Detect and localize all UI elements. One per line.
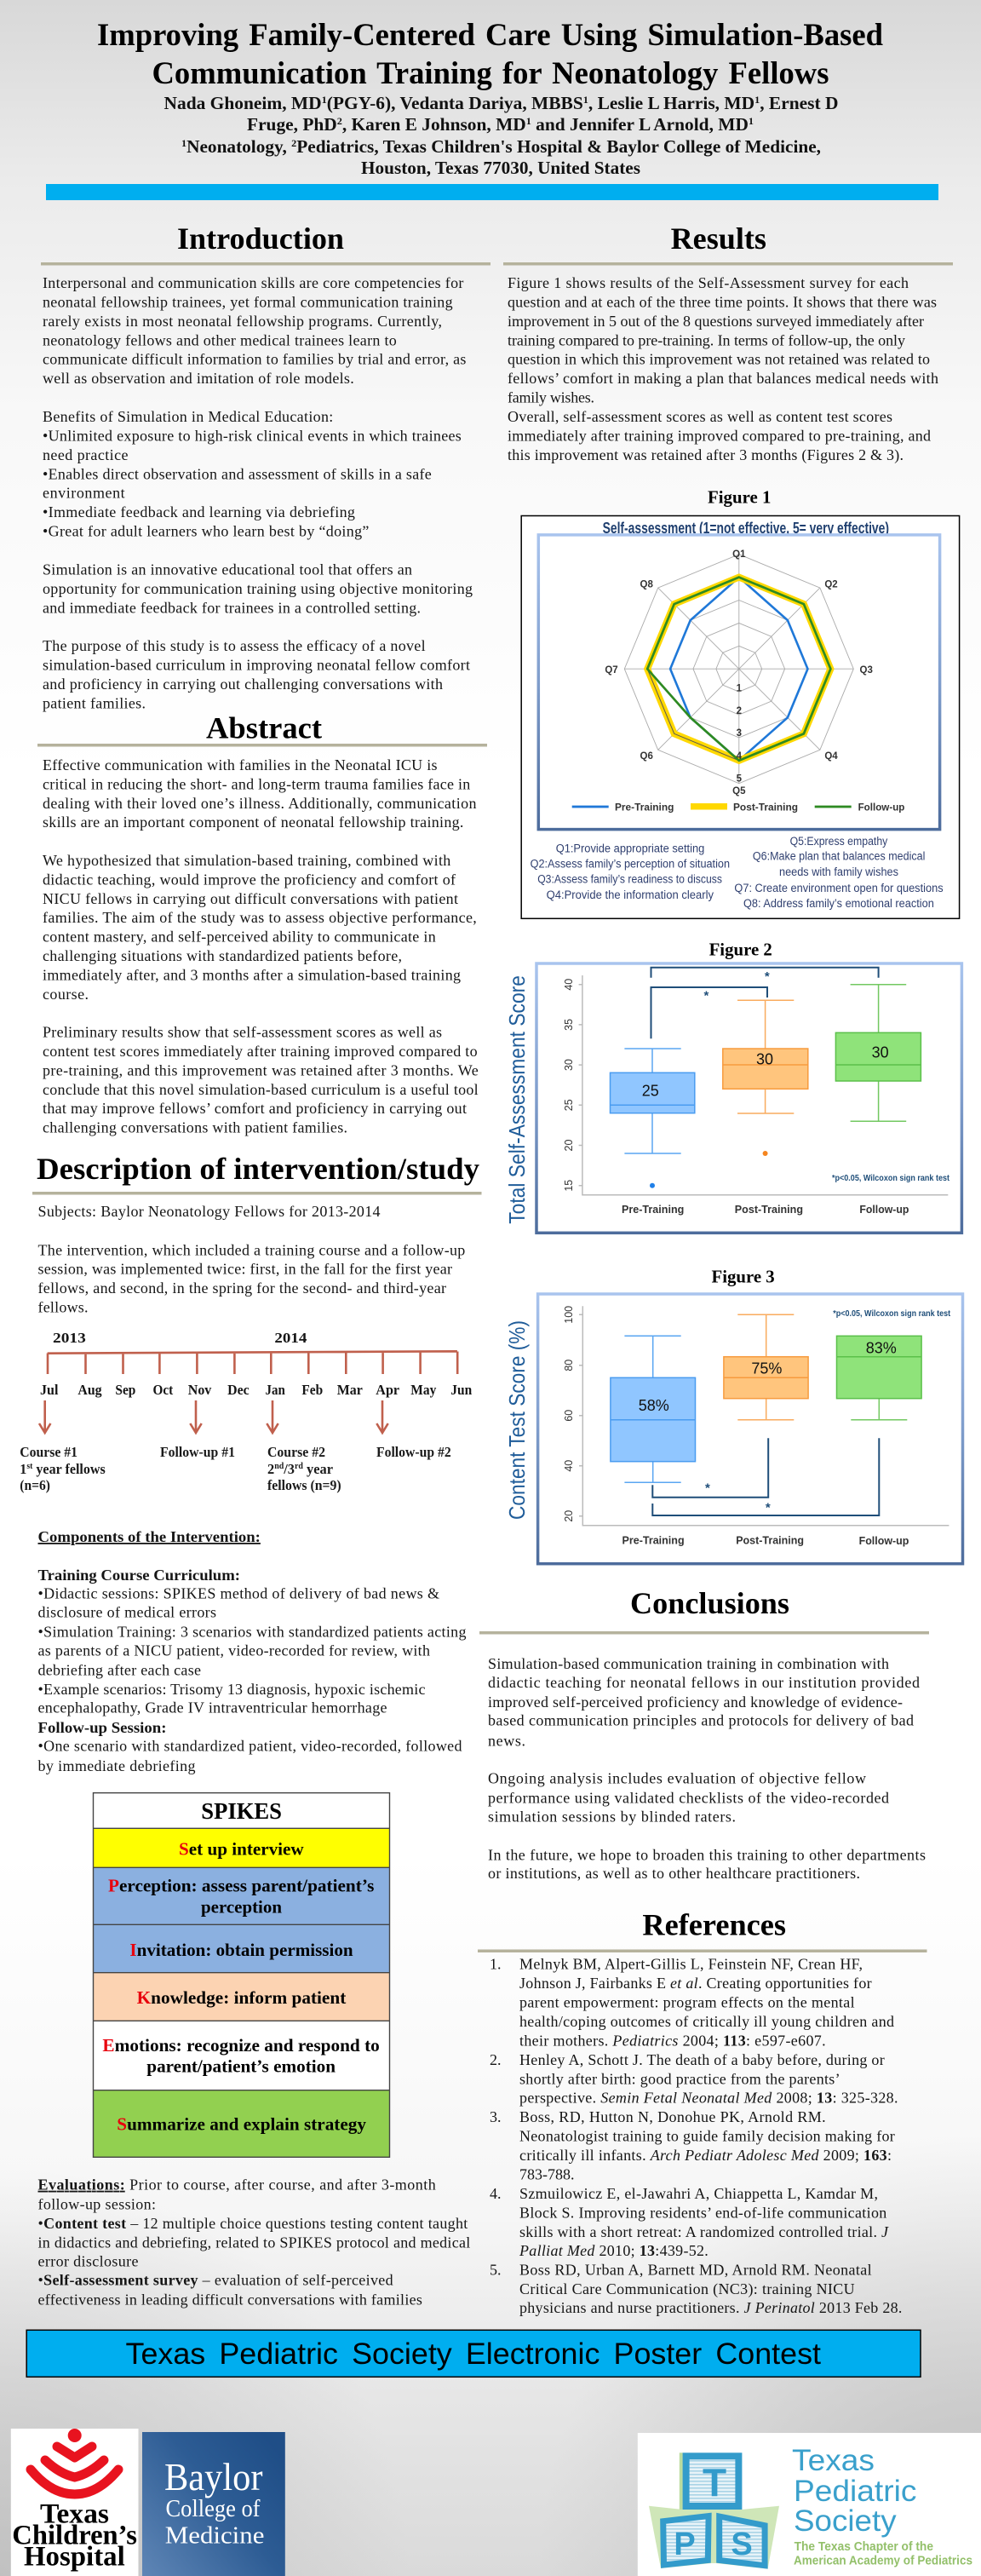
milestone labels: nd	[274, 1462, 284, 1471]
text: conclusions body: based communication principles and protocols for delivery of bad	[488, 1712, 914, 1729]
text: evaluations: error disclosure	[37, 2253, 138, 2270]
title: Communication Training for Neonatology Fellows	[152, 55, 829, 90]
icon: TPS blocks: P	[674, 2527, 696, 2562]
authors and affiliations: (PGY-6), Vedanta Dariya, MBBS	[327, 93, 583, 113]
logo: Texas Pediatric Society: Pediatric	[794, 2475, 916, 2508]
banner: Texas Pediatric Society Electronic Poster Contest: Texas Pediatric Society Electronic Poster Contest	[126, 2337, 821, 2371]
text: reference list: 3.	[490, 2108, 501, 2125]
figure 3: content test box plot: Figure 3	[712, 1267, 775, 1287]
question key: Q5:Express empathy	[790, 835, 888, 848]
SPIKES table: Invitation: obtain permission	[129, 1940, 353, 1960]
text: introduction body: Benefits of Simulation in Medical Education:	[43, 408, 333, 425]
text: abstract body: families. The aim of the study was to assess objective performance,	[43, 909, 477, 926]
text: introduction body: •Great for adult learners who learn best by “doing”	[43, 523, 369, 540]
heading: conclusions: Conclusions	[630, 1586, 789, 1620]
milestone labels: year	[303, 1461, 333, 1477]
text: reference list: Neonatologist training to guide family decision making for	[519, 2128, 895, 2145]
text: conclusions body: Ongoing analysis includes evaluation of objective fellow	[488, 1769, 866, 1786]
text: reference list: 4.	[490, 2185, 501, 2202]
SPIKES table: parent/patient’s emotion	[146, 2056, 336, 2077]
axes and ticks	[563, 975, 948, 1195]
authors and affiliations: Houston, Texas 77030, United States	[361, 158, 640, 178]
authors and affiliations: , Karen E Johnson, MD	[342, 114, 526, 135]
timeline chart: Dec	[227, 1382, 250, 1398]
authors and affiliations: 2	[291, 137, 296, 149]
timeline chart: Aug	[77, 1382, 102, 1398]
text: subjects and intervention	[37, 1203, 465, 1316]
text: abstract body: content mastery, and self-perceived ability to communicate in	[43, 929, 436, 946]
text: introduction body: rarely exists in most neonatal fellowship programs. Currently,	[43, 313, 442, 330]
text: introduction body: neonatal fellowship trainees, yet formal communication training	[43, 293, 453, 310]
figure 2: total self-assessment box plot: Figure 2	[709, 940, 772, 960]
text: abstract body: conclude that this novel simulation-based curriculum is a useful tool	[43, 1081, 479, 1098]
figure 3: content test box plot	[504, 1267, 962, 1564]
axes and ticks: 40	[563, 1460, 575, 1472]
text: components of the intervention: •Simulation Training: 3 scenarios with standardized patients acting	[37, 1624, 467, 1641]
text: introduction body: simulation-based curriculum in improving neonatal fellow comfort	[43, 657, 470, 674]
box: post-training	[724, 1314, 808, 1420]
question key: Q4:Provide the information clearly	[547, 888, 714, 901]
radar labels: Q3	[860, 665, 873, 676]
axes and ticks: 15	[563, 1180, 575, 1192]
text: introduction body: patient families.	[43, 695, 146, 712]
text: evaluations: follow-up session:	[37, 2195, 156, 2212]
text: reference list: perspective. Semin Fetal Neonatal Med 2008; 13: 325-328.	[519, 2090, 898, 2107]
text: reference list: shortly after birth: good practice from the parents’	[519, 2070, 840, 2087]
text: abstract body: challenging conversations with patient families.	[43, 1119, 347, 1136]
significance brackets: *	[765, 969, 770, 984]
radar labels: 5	[737, 773, 743, 784]
text: results body: Figure 1 shows results of the Self-Assessment survey for each	[508, 274, 909, 291]
text: results body	[508, 274, 938, 464]
heading: results: Results	[671, 221, 766, 256]
text: introduction body: •Immediate feedback and learning via debriefing	[43, 503, 355, 520]
panel: references	[478, 1908, 926, 2316]
text: conclusions body: Simulation-based communication training in combination with	[488, 1655, 889, 1672]
text: reference list: Block S. Improving residents’ end-of-life communication	[519, 2204, 886, 2221]
radar labels: 4	[737, 751, 743, 762]
logo: Baylor College of Medicine: Baylor	[164, 2456, 263, 2498]
authors and affiliations: 1	[322, 94, 327, 106]
blue header bar	[46, 184, 938, 200]
text: reference list: Palliat Med 2010; 13:439-52.	[519, 2242, 708, 2259]
authors and affiliations: 1	[754, 94, 760, 106]
milestone labels: Course #1	[20, 1444, 77, 1460]
box: follow-up: 83%	[866, 1339, 897, 1356]
text: reference list: 5.	[490, 2262, 501, 2279]
SPIKES table: perception	[201, 1897, 282, 1918]
title	[97, 17, 883, 90]
radar labels	[605, 549, 873, 796]
box: post-training	[723, 1000, 808, 1156]
logo: Texas Pediatric Society: The Texas Chapter of the	[795, 2540, 933, 2554]
figure 1: radar chart: Self-assessment (1=not effective, 5= very effective)	[603, 520, 889, 537]
title: Improving Family-Centered Care Using Simulation-Based	[97, 17, 883, 52]
logo: Texas Children's Hospital: Children’s	[12, 2521, 137, 2551]
milestone labels: fellows (n=9)	[267, 1477, 341, 1493]
timeline chart: Nov	[188, 1382, 212, 1398]
significance brackets: *	[766, 1500, 771, 1515]
text: results body: question and at each of the three time points. It shows that there was	[508, 293, 937, 310]
text: reference list: Johnson J, Fairbanks E et al. Creating opportunities for	[519, 1975, 872, 1992]
SPIKES table: Perception: assess parent/patient’s	[108, 1876, 374, 1896]
heading: abstract: Abstract	[206, 710, 322, 745]
SPIKES table: Summarize and explain strategy	[117, 2114, 366, 2135]
axes and ticks: 60	[563, 1410, 575, 1422]
x axis categories: Follow-up	[859, 1535, 909, 1547]
text: abstract body: immediately after, and 3 months after a simulation-based training	[43, 966, 461, 983]
milestone labels: year fellows	[32, 1461, 106, 1477]
SPIKES table: SPIKES	[201, 1798, 282, 1824]
question key: Q2:Assess family’s perception of situation	[531, 857, 730, 870]
text: introduction body: well as observation and imitation of role models.	[43, 370, 354, 387]
text: abstract body: NICU fellows in carrying out difficult conversations with patient	[43, 890, 458, 907]
significance brackets: *	[703, 988, 708, 1003]
text: abstract body: critical in reducing the short- and long-term trauma families face in	[43, 775, 470, 792]
text: introduction body: opportunity for communication training using objective monitoring	[43, 580, 473, 597]
text: evaluations: •Self-assessment survey – evaluation of self-perceived	[37, 2272, 393, 2289]
authors and affiliations: Fruge, PhD	[247, 114, 336, 135]
question key: Q3:Assess family’s readiness to discuss	[537, 873, 722, 886]
significance brackets	[651, 968, 879, 1038]
authors and affiliations: and Jennifer L Arnold, MD	[531, 114, 749, 135]
text: conclusions body: improved self-perceived proficiency and knowledge of evidence-	[488, 1693, 903, 1711]
radar legend: Follow-up	[858, 802, 904, 813]
x axis categories: Post-Training	[736, 1534, 804, 1546]
text: abstract body: Effective communication with families in the Neonatal ICU is	[43, 756, 438, 773]
logo: Baylor College of Medicine: Medicine	[165, 2522, 264, 2550]
text: subjects and intervention: Subjects: Baylor Neonatology Fellows for 2013-2014	[37, 1203, 380, 1220]
x axis categories	[622, 1204, 909, 1216]
radar labels: Q1	[732, 549, 746, 560]
x axis categories: Pre-Training	[622, 1204, 684, 1216]
text: abstract body: course.	[43, 986, 89, 1003]
radar legend: Pre-Training	[615, 802, 674, 813]
text: reference list: Boss, RD, Hutton N, Donohue PK, Arnold RM.	[519, 2108, 826, 2125]
text: components of the intervention: Components of the Intervention:	[37, 1528, 261, 1545]
question key: Q1:Provide appropriate setting	[556, 842, 704, 854]
text: conclusions body: In the future, we hope to broaden this training to other departments	[488, 1846, 926, 1863]
timeline chart: 2014	[274, 1330, 307, 1346]
axes and ticks	[563, 1306, 949, 1526]
text: abstract body: We hypothesized that simulation-based training, combined with	[43, 852, 450, 869]
box: follow-up	[836, 1336, 921, 1420]
icon: TPS blocks	[649, 2452, 779, 2569]
radar legend: Post-Training	[733, 802, 798, 813]
box: follow-up	[835, 985, 921, 1121]
panel: conclusions	[479, 1586, 929, 1882]
timeline chart: 2013	[53, 1330, 86, 1346]
figure 1: radar chart: Figure 1	[708, 487, 771, 508]
text: evaluations: Evaluations: Prior to course, after course, and after 3-month	[37, 2176, 436, 2194]
axes and ticks: 20	[563, 1140, 575, 1151]
text: results body: training compared to pre-training. In terms of follow-up, the only	[508, 331, 905, 348]
question key: Q6:Make plan that balances medical	[753, 850, 925, 863]
radar labels: Q2	[824, 579, 838, 589]
text: reference list	[490, 1956, 902, 2316]
text: components of the intervention: Follow-up Session:	[37, 1719, 167, 1736]
logo: Texas Children's Hospital: Texas	[40, 2499, 109, 2530]
text: reference list: parent empowerment: program effects on the mental	[519, 1994, 855, 2011]
logo: Baylor College of Medicine	[142, 2432, 285, 2576]
logo: Texas Pediatric Society: American Academy of Pediatrics	[794, 2555, 972, 2568]
logo: Baylor College of Medicine: College of	[165, 2495, 261, 2522]
question key: Q7: Create environment open for questions	[734, 882, 944, 894]
figure 2: total self-assessment box plot	[504, 940, 961, 1233]
axes and ticks: 40	[563, 979, 575, 991]
timeline chart: May	[410, 1382, 437, 1398]
text: introduction body: Interpersonal and communication skills are core competencies for	[43, 274, 463, 291]
significance brackets: *	[705, 1481, 710, 1496]
x axis categories: Follow-up	[859, 1204, 909, 1216]
authors and affiliations: 1	[583, 94, 588, 106]
timeline chart: Apr	[376, 1382, 399, 1398]
box: pre-training	[610, 1049, 695, 1188]
text: reference list: 1.	[490, 1956, 501, 1973]
panel: introduction	[41, 221, 490, 712]
text: reference list: 783-788.	[519, 2165, 574, 2182]
text: components of the intervention: •Didactic sessions: SPIKES method of delivery of bad news &	[37, 1585, 439, 1602]
text: abstract body: didactic teaching, would improve the proficiency and comfort of	[43, 871, 456, 888]
text: conclusions body: or institutions, as well as to other healthcare practitioners.	[488, 1865, 860, 1882]
text: reference list: 2.	[490, 2051, 501, 2068]
axes and ticks: 20	[563, 1510, 575, 1522]
box: post-training: 75%	[751, 1360, 782, 1377]
text: components of the intervention: Training Course Curriculum:	[37, 1567, 240, 1584]
milestone labels: (n=6)	[20, 1477, 50, 1493]
authors and affiliations	[164, 93, 838, 178]
logo: Texas Children's Hospital: Hospital	[24, 2542, 125, 2573]
question key: needs with family wishes	[779, 865, 898, 878]
heading: description of intervention/study: Description of intervention/study	[37, 1152, 479, 1186]
SPIKES table: Emotions: recognize and respond to	[102, 2035, 380, 2056]
text: results body: immediately after training improved compared to pre-training, and	[508, 427, 931, 444]
text: evaluations: •Content test – 12 multiple choice questions testing content taught	[37, 2215, 468, 2232]
text: evaluations	[37, 2176, 470, 2309]
text: subjects and intervention: The intervention, which included a training course and a follow-up	[37, 1241, 465, 1258]
text: components of the intervention: disclosure of medical errors	[37, 1604, 216, 1621]
radar labels: 3	[737, 728, 742, 739]
text: conclusions body	[488, 1655, 926, 1882]
axes and ticks: 25	[563, 1099, 575, 1111]
arrows to milestones	[39, 1400, 388, 1433]
milestone labels: Course #2	[267, 1444, 325, 1460]
text: introduction body: communicate difficult information to families by trial and error, as	[43, 351, 466, 368]
timeline chart	[20, 1330, 472, 1493]
text: introduction body: The purpose of this study is to assess the efficacy of a novel	[43, 637, 426, 654]
text: introduction body: •Enables direct observation and assessment of skills in a safe	[43, 465, 432, 482]
authors and affiliations: , Ernest D	[760, 93, 838, 113]
text: results body: family wishes.	[508, 389, 594, 406]
authors and affiliations: Nada Ghoneim, MD	[164, 93, 318, 113]
radar labels: Q6	[640, 751, 653, 762]
text: reference list: Critical Care Communication (NC3): training NICU	[519, 2280, 855, 2298]
text: abstract body: pre-training, and this improvement was retained after 3 months. We	[43, 1061, 479, 1078]
icon: TPS blocks: T	[703, 2461, 726, 2505]
timeline chart: Oct	[153, 1382, 174, 1398]
text: introduction body: and immediate feedback for trainees in a controlled setting.	[43, 599, 421, 616]
milestone labels	[20, 1444, 451, 1493]
text: reference list: physicians and nurse practitioners. J Perinatol 2013 Feb 28.	[519, 2299, 902, 2316]
milestone labels: Follow-up #2	[376, 1444, 451, 1460]
milestone labels: /3	[283, 1461, 295, 1477]
timeline chart: Jun	[450, 1382, 472, 1398]
text: abstract body: skills are an important component of neonatal fellowship training.	[43, 814, 463, 831]
authors and affiliations: 2	[337, 115, 342, 127]
authors and affiliations: , Leslie L Harris, MD	[588, 93, 754, 113]
heading: references: References	[642, 1908, 786, 1942]
question key	[531, 835, 944, 910]
text: results body: question in which this improvement was not retained was related to	[508, 351, 930, 368]
text: conclusions body: news.	[488, 1732, 525, 1749]
y axis title: Total Self-Assessment Score	[504, 975, 530, 1224]
radar labels: Q8	[640, 579, 653, 589]
timeline chart: Mar	[337, 1382, 363, 1398]
authors and affiliations: 1	[749, 115, 754, 127]
heading: introduction: Introduction	[177, 221, 344, 256]
text: subjects and intervention: fellows, and second, in the spring for the second- and third-year	[37, 1279, 446, 1297]
x axis categories: Post-Training	[735, 1204, 803, 1216]
text: reference list: skills with a short retreat: A randomized controlled trial. J	[519, 2223, 889, 2240]
authors and affiliations: Neonatology,	[186, 136, 291, 157]
logo: Texas Pediatric Society	[638, 2433, 981, 2576]
text: results body: Overall, self-assessment scores as well as content test scores	[508, 408, 892, 425]
SPIKES table	[94, 1793, 390, 2157]
text: reference list: Boss RD, Urban A, Barnett MD, Arnold RM. Neonatal	[519, 2262, 872, 2279]
text: components of the intervention: •Example scenarios: Trisomy 13 diagnosis, hypoxic ischemic	[37, 1681, 426, 1698]
text: evaluations: effectiveness in leading difficult conversations with families	[37, 2291, 422, 2309]
milestone labels: 1	[20, 1461, 27, 1477]
radar labels: Q7	[605, 665, 618, 676]
text: introduction body: neonatology fellows and other medical trainees learn to	[43, 331, 397, 348]
SPIKES table: Set up interview	[179, 1839, 305, 1860]
text: reference list: Melnyk BM, Alpert-Gillis L, Feinstein NF, Crean HF,	[519, 1956, 863, 1973]
x axis categories: Pre-Training	[622, 1534, 685, 1546]
text: conclusions body: simulation sessions by blinded raters.	[488, 1808, 736, 1825]
text: evaluations: in didactics and debriefing, related to SPIKES protocol and medical	[37, 2234, 470, 2251]
text: reference list: Szmuilowicz E, el-Jawahri A, Chiappetta L, Kamdar M,	[519, 2185, 878, 2202]
text: reference list: Henley A, Schott J. The death of a baby before, during or	[519, 2051, 885, 2068]
panel: results	[503, 221, 962, 1564]
text: components of the intervention	[37, 1528, 467, 1774]
text: introduction body	[43, 274, 473, 712]
note: significance: *p<0.05, Wilcoxon sign rank test	[833, 1308, 951, 1319]
timeline chart: Feb	[301, 1382, 323, 1398]
milestone labels: 2	[267, 1461, 274, 1477]
text: conclusions body: didactic teaching for neonatal fellows in our institution provided	[488, 1674, 920, 1691]
milestone labels: Follow-up #1	[160, 1444, 235, 1460]
logo: Texas Children's Hospital	[11, 2429, 138, 2576]
axes and ticks: 35	[563, 1019, 575, 1031]
text: components of the intervention: debriefing after each case	[37, 1662, 201, 1679]
box: pre-training: 58%	[639, 1397, 669, 1414]
authors and affiliations: 1	[181, 137, 186, 149]
text: abstract body: dealing with their loved one’s illness. Additionally, communication	[43, 795, 477, 812]
text: results body: this improvement was retained after 3 months (Figures 2 & 3).	[508, 446, 904, 464]
text: reference list: their mothers. Pediatrics 2004; 113: e597-e607.	[519, 2032, 826, 2049]
text: subjects and intervention: session, was implemented twice: first, in the fall for the first year	[37, 1261, 452, 1278]
text: reference list: critically ill infants. Arch Pediatr Adolesc Med 2009; 163:	[519, 2147, 892, 2164]
timeline chart: Jul	[40, 1382, 59, 1398]
text: introduction body: •Unlimited exposure to high-risk clinical events in which trainees	[43, 427, 462, 444]
text: components of the intervention: by immediate debriefing	[37, 1757, 196, 1774]
text: components of the intervention: as parents of a NICU patient, video-recorded for review, with	[37, 1642, 430, 1659]
panel: abstract	[37, 710, 487, 1136]
SPIKES table: Knowledge: inform patient	[137, 1987, 346, 2008]
text: abstract body	[43, 756, 479, 1136]
radar grid and series	[624, 555, 853, 784]
text: results body: fellows’ comfort in making a plan that balances medical needs with	[508, 370, 938, 387]
text: conclusions body: performance using validated checklists of the video-recorded	[488, 1790, 889, 1807]
logo: Texas Pediatric Society: Texas	[792, 2444, 875, 2477]
text: reference list: health/coping outcomes of critically ill young children and	[519, 2013, 894, 2030]
text: abstract body: challenging situations with standardized patients before,	[43, 947, 402, 964]
text: introduction body: and proficiency in carrying out challenging conversations with	[43, 676, 443, 693]
authors and affiliations: 1	[526, 115, 531, 127]
significance brackets	[652, 1438, 879, 1515]
logo: Texas Pediatric Society: Society	[794, 2504, 897, 2538]
text: introduction body: environment	[43, 485, 125, 502]
text: abstract body: that may improve fellows’ comfort and proficiency in carrying out	[43, 1100, 467, 1117]
box: follow-up: 30	[872, 1044, 889, 1061]
note: significance: *p<0.05, Wilcoxon sign rank test	[832, 1173, 949, 1183]
icon: TPS blocks: S	[731, 2527, 753, 2562]
box: pre-training	[611, 1336, 695, 1482]
y axis title: Content Test Score (%)	[504, 1320, 530, 1520]
banner: Texas Pediatric Society Electronic Poster Contest	[26, 2330, 921, 2377]
x axis categories	[622, 1534, 909, 1547]
box: post-training: 30	[756, 1050, 773, 1067]
axes and ticks: 100	[563, 1306, 575, 1324]
text: introduction body: need practice	[43, 446, 128, 463]
timeline chart: Jan	[266, 1382, 285, 1398]
text: results body: improvement in 5 out of the 8 questions surveyed immediately after	[508, 313, 924, 330]
radar legend	[572, 802, 904, 813]
text: subjects and intervention: fellows.	[37, 1299, 89, 1316]
radar labels: 2	[737, 706, 742, 716]
text: abstract body: content test scores immediately after training improved compared to	[43, 1043, 478, 1060]
question key: Q8: Address family’s emotional reaction	[743, 897, 934, 910]
text: components of the intervention: encephalopathy, Grade IV intraventricular hemorrhage	[37, 1699, 387, 1716]
authors and affiliations: Pediatrics, Texas Children's Hospital & Baylor College of Medicine,	[296, 136, 821, 157]
panel: description of intervention	[20, 1152, 482, 2309]
text: abstract body: Preliminary results show that self-assessment scores as well as	[43, 1024, 442, 1041]
radar labels: Q5	[732, 786, 746, 796]
radar labels: 1	[737, 684, 743, 694]
axes and ticks: 30	[563, 1059, 575, 1071]
radar labels: Q4	[824, 751, 838, 762]
text: introduction body: Simulation is an innovative educational tool that offers an	[43, 561, 412, 578]
axes and ticks: 80	[563, 1360, 575, 1371]
figure 1: radar chart	[521, 487, 960, 918]
text: components of the intervention: •One scenario with standardized patient, video-recorded, followed	[37, 1738, 462, 1755]
box: pre-training: 25	[642, 1083, 659, 1100]
timeline chart: Sep	[115, 1382, 135, 1398]
milestone labels: rd	[295, 1462, 303, 1471]
milestone labels: st	[26, 1462, 33, 1471]
